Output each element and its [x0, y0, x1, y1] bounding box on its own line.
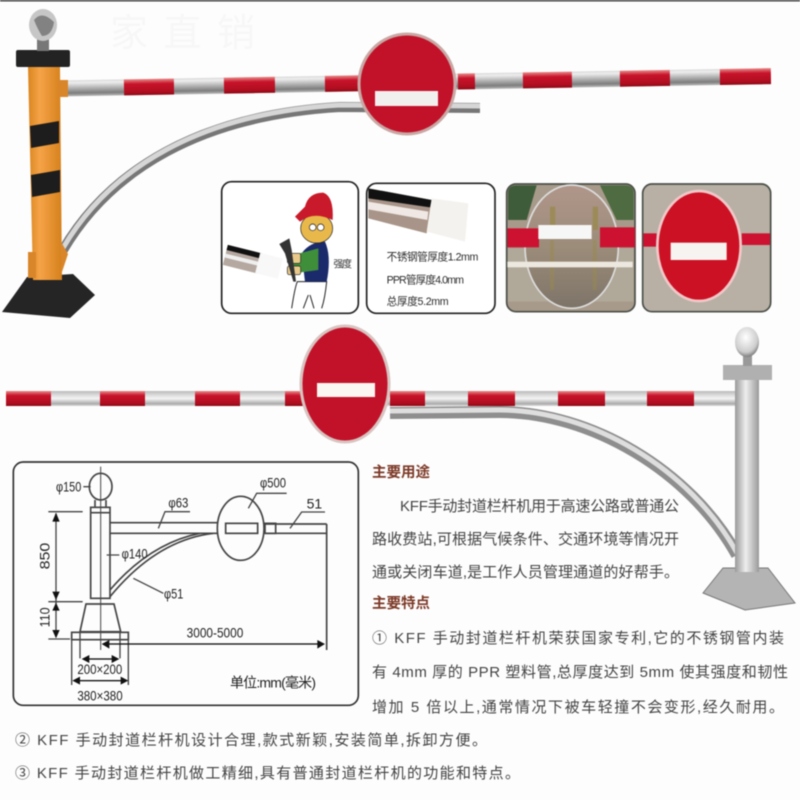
- black bands: [30, 121, 60, 197]
- watermark: 家直销: [110, 13, 255, 55]
- dimension arrows: [52, 513, 325, 685]
- horizontal arm: [60, 68, 771, 96]
- top edge line: [0, 0, 800, 2]
- text block: feature three: ③ KFF 手动封道栏杆机做工精细,具有普通封道栏杆机的功能和特点。: [15, 765, 520, 782]
- dimension labels: φ500: [260, 474, 286, 490]
- thickness text: 不锈钢管厚度1.2mm: [387, 251, 478, 264]
- heading: main uses: 主要用途: [372, 463, 430, 481]
- dimension labels: 380×380: [77, 688, 123, 704]
- post: [735, 378, 759, 572]
- arm and tube welds: [28, 80, 68, 278]
- dimension labels: φ150: [56, 479, 82, 495]
- horizontal arm: [6, 391, 736, 406]
- barrier two: steel post with arm: [6, 327, 795, 610]
- clamps: [550, 207, 598, 290]
- road: [508, 248, 634, 302]
- text block: main uses: KFF手动封道栏杆机用于高速公路或普通公: [400, 498, 679, 515]
- text block: feature one: 有 4mm 厚的 PPR 塑料管,总厚度达到 5mm 使其强度和韧性: [372, 664, 788, 681]
- steel ball: [29, 9, 57, 51]
- dimension labels: 850: [36, 542, 52, 569]
- text block: feature one: [372, 629, 788, 716]
- red arm: [643, 233, 770, 247]
- text block: feature two: ② KFF 手动封道栏杆机设计合理,款式新颖,安装简单,拆卸方便。: [15, 732, 487, 749]
- base plate: [2, 274, 95, 318]
- orange post: [28, 67, 62, 280]
- dimension labels: 51: [307, 495, 322, 511]
- dimension labels: 单位:mm(毫米): [230, 674, 316, 690]
- curved support tube: [390, 410, 737, 555]
- thickness text: PPR管厚度4.0mm: [387, 273, 464, 286]
- photo panel: sign front: [643, 184, 771, 312]
- label: 强度: [333, 258, 352, 271]
- technical drawing: [48, 467, 327, 685]
- worker: [279, 193, 333, 308]
- photo panel: sign rear: [507, 184, 635, 312]
- text block: main uses: 路收费站,可根据气候条件、交通环境等情况开: [372, 530, 679, 548]
- stop sign two: [301, 326, 389, 442]
- text block: main uses: [372, 498, 679, 581]
- dimension labels: 3000-5000: [187, 625, 244, 641]
- thickness text: [387, 251, 478, 308]
- dimension diagram panel: [13, 462, 358, 705]
- text block: main uses: 通或关闭车道,是工作人员管理通道的好帮手。: [372, 564, 679, 581]
- red arm: [507, 225, 635, 267]
- greenery: [508, 185, 537, 220]
- post cap: [723, 365, 772, 380]
- barrier one: orange post with red and white arm: [2, 9, 771, 318]
- photo panel: pipe thickness: [367, 183, 495, 313]
- sign: [657, 191, 741, 301]
- stop sign one: [359, 34, 455, 134]
- heading: main features: 主要特点: [372, 594, 430, 612]
- pipe section: [368, 188, 468, 242]
- text block: feature one: 增加 5 倍以上,通常情况下被车轻撞不会变形,经久耐用。: [372, 698, 784, 716]
- steel ball: [735, 327, 759, 366]
- photo panel: worker cartoon: [222, 182, 358, 313]
- thickness text: 总厚度5.2mm: [387, 295, 449, 308]
- base plate: [703, 568, 795, 610]
- text block: feature one: ① KFF 手动封道栏杆机荣获国家专利,它的不锈钢管内装: [372, 629, 784, 647]
- post cap: [16, 50, 70, 67]
- dimension labels: φ63: [168, 494, 189, 510]
- dimension labels: φ140: [122, 545, 148, 561]
- transparent sign back: [525, 185, 618, 308]
- dimension labels: [36, 474, 322, 704]
- dimension labels: 110: [36, 607, 52, 627]
- dimension labels: φ51: [164, 585, 184, 601]
- dimension labels: 200×200: [77, 661, 123, 677]
- pipe: [223, 245, 283, 279]
- curved support tube: [63, 105, 480, 250]
